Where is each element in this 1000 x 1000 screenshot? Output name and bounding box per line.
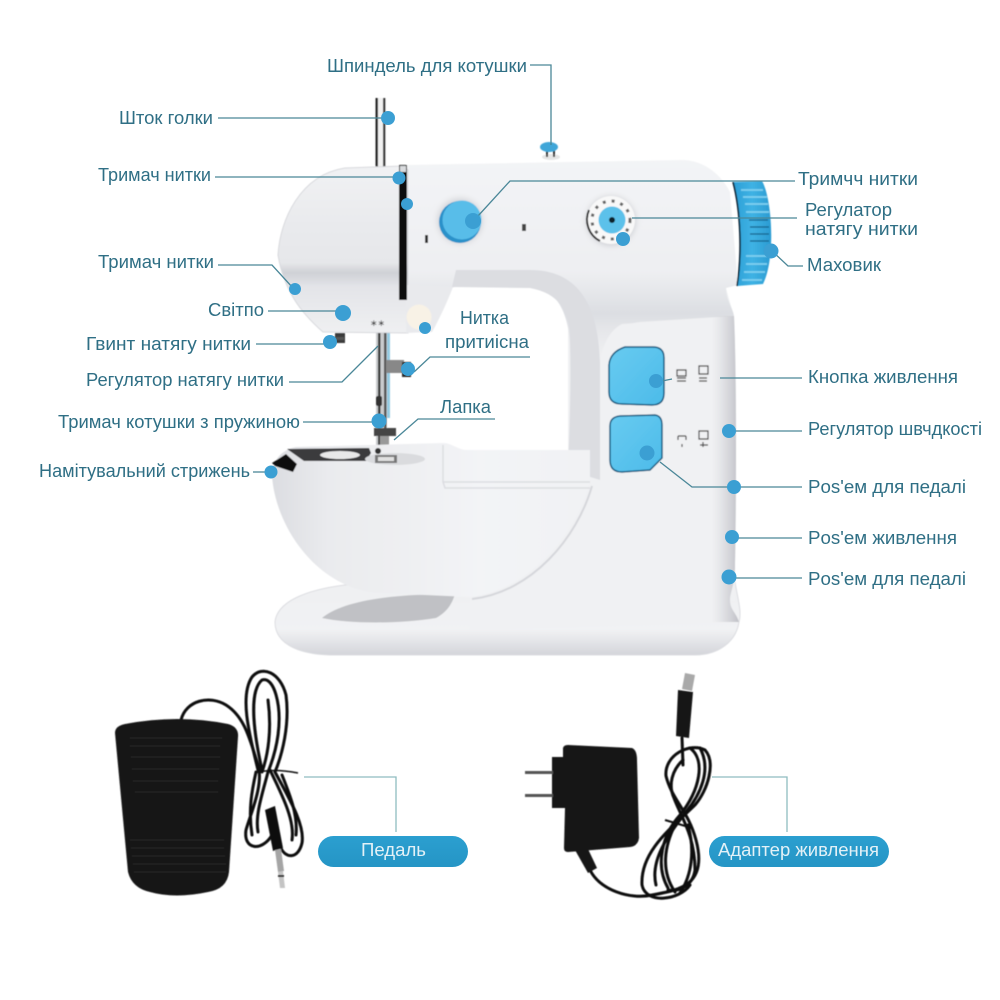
pedal leader [304,777,396,832]
callout: thread holder side: Тримач нитки [98,252,214,272]
jack plug [265,806,285,888]
callout: thread holder right: Тримчч нитки [798,169,918,189]
power adapter [525,673,710,898]
callout: power socket: Pos'ем живлення [808,528,957,548]
callout: tension regulator left: Регулятор натягу нитки [86,370,284,390]
pedal body [115,719,238,896]
callout: pedal socket 1: Pos'ем для педалі [808,477,966,497]
tension screw [328,333,345,343]
adapter prongs [525,771,553,797]
callout: tension screw: Гвинт натягу нитки [86,334,251,354]
callout: power button [649,367,958,388]
spool pin [540,142,560,160]
needle bar [376,98,386,168]
callout: spool spindle [327,56,551,145]
panel icons [677,366,708,447]
machine bowl [272,443,590,597]
stitch knob [437,198,483,244]
front plate [406,285,453,333]
callout: speed regulator [722,419,982,439]
callout: power button: Кнопка живлення [808,367,958,387]
callout: speed regulator: Регулятор швчдкості [808,419,982,439]
callout: thread holder right [465,169,918,229]
small logo: ∗∗ [370,318,385,328]
callout: thread holder side [98,252,301,295]
callout: thread holder top: Тримач нитки [98,165,211,185]
callout: thread holder top [98,165,413,210]
callout: pedal socket 1 [640,446,966,497]
right edge shading [712,316,739,622]
needle plate [365,448,425,465]
adapter label [709,836,889,867]
adapter plug [676,673,695,765]
tension dial [586,196,636,246]
callout: needle bar [119,108,395,128]
callout: spool spindle: Шпиндель для котушки [327,56,527,76]
adapter body [552,745,639,852]
callout: presser foot: Лапка [440,397,492,417]
foot pedal [115,671,302,896]
light bulb [406,304,432,330]
callout: needle bar: Шток голки [119,108,213,128]
sewing head [278,166,408,333]
pedal cable [181,671,302,856]
machine arm [405,160,738,362]
callout: flywheel: Маховик [807,255,881,275]
base shadow [322,594,455,622]
sewing machine [272,98,771,655]
flywheel [733,181,771,286]
callout: light: Світпо [208,300,264,320]
machine column [470,288,739,630]
power button [610,415,662,472]
thread guide strip [399,165,407,300]
callout: pressure thread: Нитка [460,308,510,328]
adapter label: Адаптер живлення [718,840,879,860]
callout: power socket [725,528,957,548]
callout: pedal socket 2: Pos'ем для педалі [808,569,966,589]
callout: tension regulator right: Регулатор [805,200,892,220]
callout: flywheel [764,244,881,275]
callout: bobbin winder: Намітувальний стрижень [39,461,250,481]
callout: presser foot [394,397,495,440]
pedal label: Педаль [361,840,426,860]
bowl arc shade [472,486,592,599]
arch band [452,270,600,480]
bobbin cover [272,448,371,472]
callout: tension screw [86,334,337,354]
callout: light [208,300,351,321]
adapter strain relief [575,849,597,873]
callout: spring bobbin holder: Тримач котушки з пружиною [58,412,300,432]
adapter cable [590,748,710,898]
speed button [609,347,664,405]
callout: pedal socket 2 [722,569,966,589]
adapter leader [712,777,787,832]
callout: pressure thread [401,308,530,376]
callout: tension regulator right [616,200,918,246]
callout: pressure thread: притиісна [445,332,530,352]
table step [443,445,590,488]
callout: tension regulator right: натягу нитки [805,219,918,239]
callout: tension regulator left [86,346,378,390]
button panel [600,316,736,600]
machine base [275,582,740,655]
pedal ridges [130,738,222,792]
presser assembly [374,333,411,454]
pedal label [318,836,468,867]
stitch icons [425,224,526,243]
